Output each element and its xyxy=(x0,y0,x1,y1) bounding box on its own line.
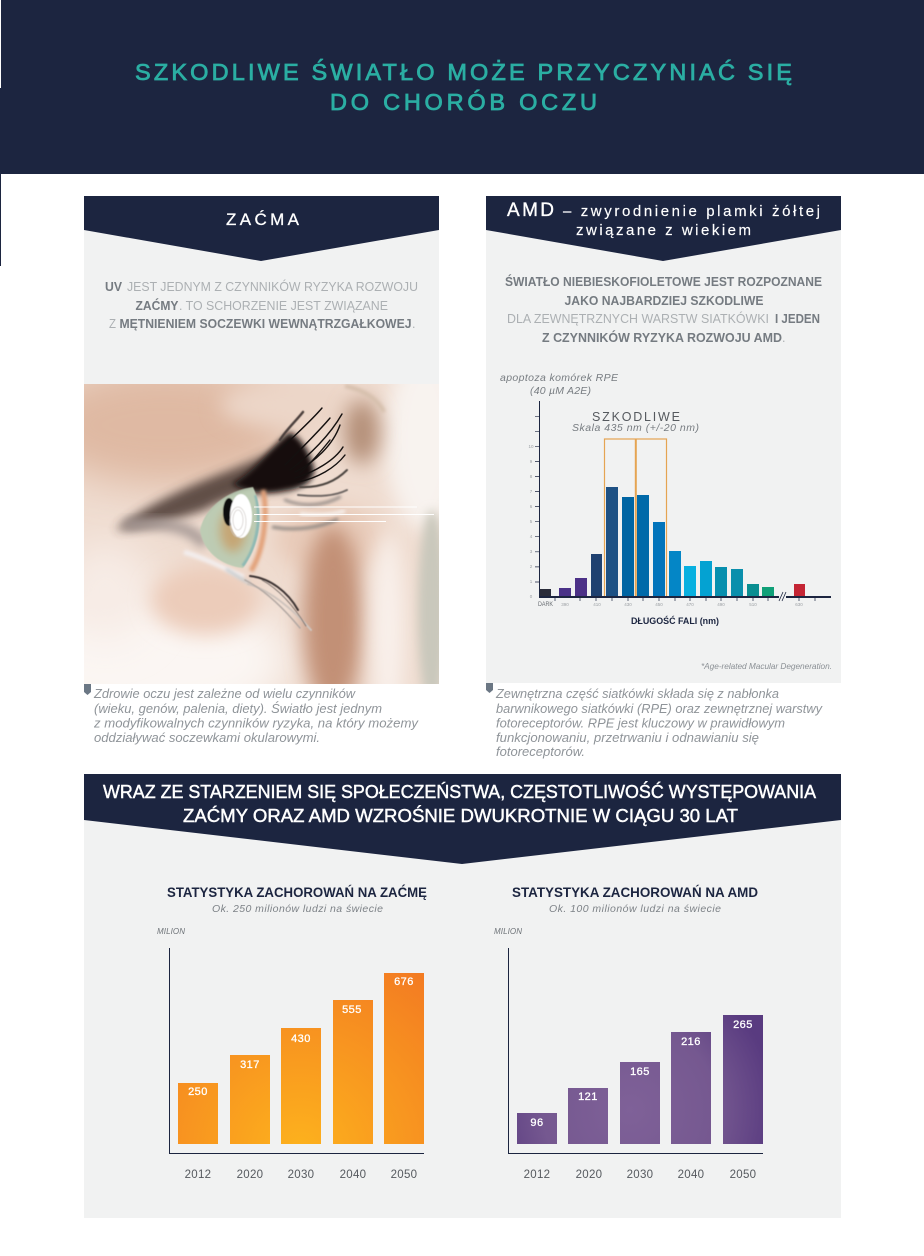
y axis numbers: 0 xyxy=(530,594,533,599)
text block: zaćma intro: . TO SCHORZENIE JEST ZWIĄZANE xyxy=(179,299,388,313)
text block: zaćma intro: JEST JEDNYM Z CZYNNIKÓW RYZYKA ROZWOJU xyxy=(127,279,418,294)
bar values: 555 xyxy=(342,1004,362,1016)
x axis labels: 630 xyxy=(795,602,803,607)
title: SZKODLIWE ŚWIATŁO MOŻE PRZYCZYNIAĆ SIĘ xyxy=(135,58,792,85)
caption: AMD: fotoreceptorów. RPE jest kluczowy w prawidłowym xyxy=(496,716,785,730)
harmful range box xyxy=(604,439,666,597)
x axis labels: 390 xyxy=(561,602,569,607)
reflected lashes on skin xyxy=(272,519,338,529)
chart heading: STATYSTYKA ZACHOROWAŃ NA AMD xyxy=(512,885,758,900)
caption: AMD: fotoreceptorów. xyxy=(496,745,585,759)
bar values: 430 xyxy=(291,1033,311,1045)
y axis numbers: 1 xyxy=(530,579,533,584)
x axis title: DŁUGOŚĆ FALI (nm) xyxy=(631,615,719,626)
title: DO CHORÓB OCZU xyxy=(330,89,597,115)
heading banner: AMD: – zwyrodnienie plamki żółtej xyxy=(563,203,820,220)
y axis numbers: 6 xyxy=(530,504,533,509)
bar values: 265 xyxy=(733,1019,753,1031)
text block: zaćma intro: Z xyxy=(109,317,116,331)
bars xyxy=(517,1015,763,1144)
bars xyxy=(540,487,805,597)
year labels: 2040 xyxy=(340,1169,366,1181)
caption: zaćma: (wieku, genów, palenia, diety). Światło jest jednym xyxy=(94,701,382,716)
caption: AMD: funkcjonowaniu, przetrwaniu i odnawianiu się xyxy=(496,731,759,745)
footnote: *Age-related Macular Degeneration. xyxy=(701,661,832,671)
axis break mark xyxy=(779,592,786,601)
eyelid shadow xyxy=(115,445,290,530)
caption: zaćma: z modyfikowalnych czynników ryzyka, na który możemy xyxy=(93,716,419,730)
caption: AMD: Zewnętrzna część siatkówki składa się z nabłonka xyxy=(495,687,779,701)
light rays xyxy=(254,507,434,522)
y axis numbers: 9 xyxy=(530,459,533,464)
axes and ticks xyxy=(535,401,831,601)
harmful range label: SZKODLIWE xyxy=(592,410,680,424)
year labels xyxy=(524,1169,756,1181)
heading banner: AMD xyxy=(486,196,841,261)
year labels: 2040 xyxy=(678,1169,704,1181)
y axis numbers: 8 xyxy=(530,474,533,479)
year labels: 2012 xyxy=(185,1169,211,1181)
text block: AMD intro: DLA ZEWNĘTRZNYCH WARSTW SIATKÓWKI xyxy=(507,311,769,326)
chart heading: Ok. 250 milionów ludzi na świecie xyxy=(212,903,383,915)
year labels: 2020 xyxy=(237,1169,263,1181)
panel: statistics xyxy=(84,774,841,1218)
title xyxy=(135,58,792,115)
chart heading xyxy=(494,885,758,936)
harmful range label: Skala 435 nm (+/-20 nm) xyxy=(572,422,699,434)
x axis labels: DARK xyxy=(538,601,554,608)
axes xyxy=(170,948,424,1154)
skin rim xyxy=(251,490,265,571)
y axis label: apoptoza komórek RPE xyxy=(500,372,619,384)
chart heading: Ok. 100 milionów ludzi na świecie xyxy=(549,903,721,915)
bar values: 250 xyxy=(188,1086,208,1098)
bar values: 96 xyxy=(530,1117,544,1129)
heading banner: statistics: WRAZ ZE STARZENIEM SIĘ SPOŁECZEŃSTWA, CZĘSTOTLIWOŚĆ WYSTĘPOWANIA xyxy=(103,781,816,802)
bar values: 165 xyxy=(630,1066,650,1078)
y axis numbers: 4 xyxy=(530,534,533,539)
y axis label: (40 µM A2E) xyxy=(530,385,591,397)
y axis numbers xyxy=(528,444,534,599)
axes xyxy=(508,948,763,1154)
heading banner: zaćma: ZAĆMA xyxy=(226,210,300,229)
y axis numbers: 3 xyxy=(530,549,533,554)
lower lashes xyxy=(245,576,311,630)
bullet marker right xyxy=(486,683,493,693)
text block: zaćma intro: . xyxy=(412,317,415,331)
caption: AMD: barwnikowego siatkówki (RPE) oraz zewnętrznej warstwy xyxy=(496,702,823,716)
chart heading: MILION xyxy=(494,927,522,936)
year labels: 2030 xyxy=(627,1169,653,1181)
y axis numbers: 5 xyxy=(530,519,533,524)
illustration: eye in profile xyxy=(84,384,439,684)
chart heading: STATYSTYKA ZACHOROWAŃ NA ZAĆMĘ xyxy=(167,885,427,900)
y axis numbers: 7 xyxy=(530,489,533,494)
text block: AMD intro: Z CZYNNIKÓW RYZYKA ROZWOJU AMD xyxy=(542,330,782,345)
text block: AMD intro xyxy=(505,274,822,345)
header band xyxy=(0,0,924,174)
heading banner: zaćma xyxy=(84,196,439,261)
heading banner: AMD: związane z wiekiem xyxy=(576,222,751,239)
y axis label xyxy=(500,372,619,397)
heading banner: statistics: ZAĆMY ORAZ AMD WZROŚNIE DWUKROTNIE W CIĄGU 30 LAT xyxy=(183,805,738,826)
heading banner: statistics xyxy=(84,774,841,864)
harmful range label xyxy=(572,410,699,434)
chart: AMD statistics xyxy=(494,885,763,1181)
caption: zaćma: Zdrowie oczu jest zależne od wielu czynników xyxy=(93,687,356,701)
text block: AMD intro: JAKO NAJBARDZIEJ SZKODLIWE xyxy=(564,294,764,308)
chart: zaćma statistics xyxy=(157,885,427,1181)
year labels: 2050 xyxy=(391,1169,417,1181)
chart: apoptoza vs wavelength xyxy=(500,372,831,626)
text block: AMD intro: I JEDEN xyxy=(775,312,820,326)
bar values xyxy=(530,1019,753,1129)
bullet marker left xyxy=(84,684,91,695)
x axis labels: 410 xyxy=(593,602,601,607)
text block: zaćma intro: MĘTNIENIEM SOCZEWKI WEWNĄTRZGAŁKOWEJ xyxy=(120,317,412,331)
panel: AMD xyxy=(486,196,841,683)
year labels xyxy=(185,1169,417,1181)
x axis labels: 430 xyxy=(624,602,632,607)
text block: AMD intro: . xyxy=(782,331,785,345)
year labels: 2030 xyxy=(288,1169,314,1181)
caption: zaćma xyxy=(93,687,419,745)
caption: AMD xyxy=(495,687,823,759)
year labels: 2012 xyxy=(524,1169,550,1181)
bar values: 317 xyxy=(240,1059,260,1071)
panel: zaćma xyxy=(84,196,439,684)
x axis labels: 510 xyxy=(749,602,757,607)
text block: AMD intro: ŚWIATŁO NIEBIESKOFIOLETOWE JEST ROZPOZNANE xyxy=(505,274,822,289)
x axis labels xyxy=(538,601,803,608)
year labels: 2020 xyxy=(576,1169,602,1181)
chart heading: MILION xyxy=(157,927,185,936)
text block: zaćma intro: ZAĆMY xyxy=(136,298,179,313)
caption: zaćma: oddziaływać soczewkami okularowymi. xyxy=(94,731,320,745)
bars xyxy=(178,973,424,1144)
x axis labels: 470 xyxy=(686,602,694,607)
lower eyelid highlight xyxy=(184,552,244,577)
year labels: 2050 xyxy=(730,1169,756,1181)
y axis numbers: 10 xyxy=(528,444,534,449)
x axis labels: 490 xyxy=(717,602,725,607)
heading banner: AMD: AMD xyxy=(507,200,554,221)
x axis labels: 450 xyxy=(655,602,663,607)
bar values: 216 xyxy=(681,1036,701,1048)
text block: zaćma intro xyxy=(105,279,418,331)
bar values xyxy=(188,976,414,1098)
bar values: 676 xyxy=(394,976,414,988)
y axis numbers: 2 xyxy=(530,564,533,569)
bar values: 121 xyxy=(578,1091,598,1103)
eyelashes xyxy=(280,408,347,505)
lash base xyxy=(232,432,314,492)
text block: zaćma intro: UV xyxy=(105,280,123,294)
chart heading xyxy=(157,885,427,936)
iris xyxy=(200,486,260,568)
